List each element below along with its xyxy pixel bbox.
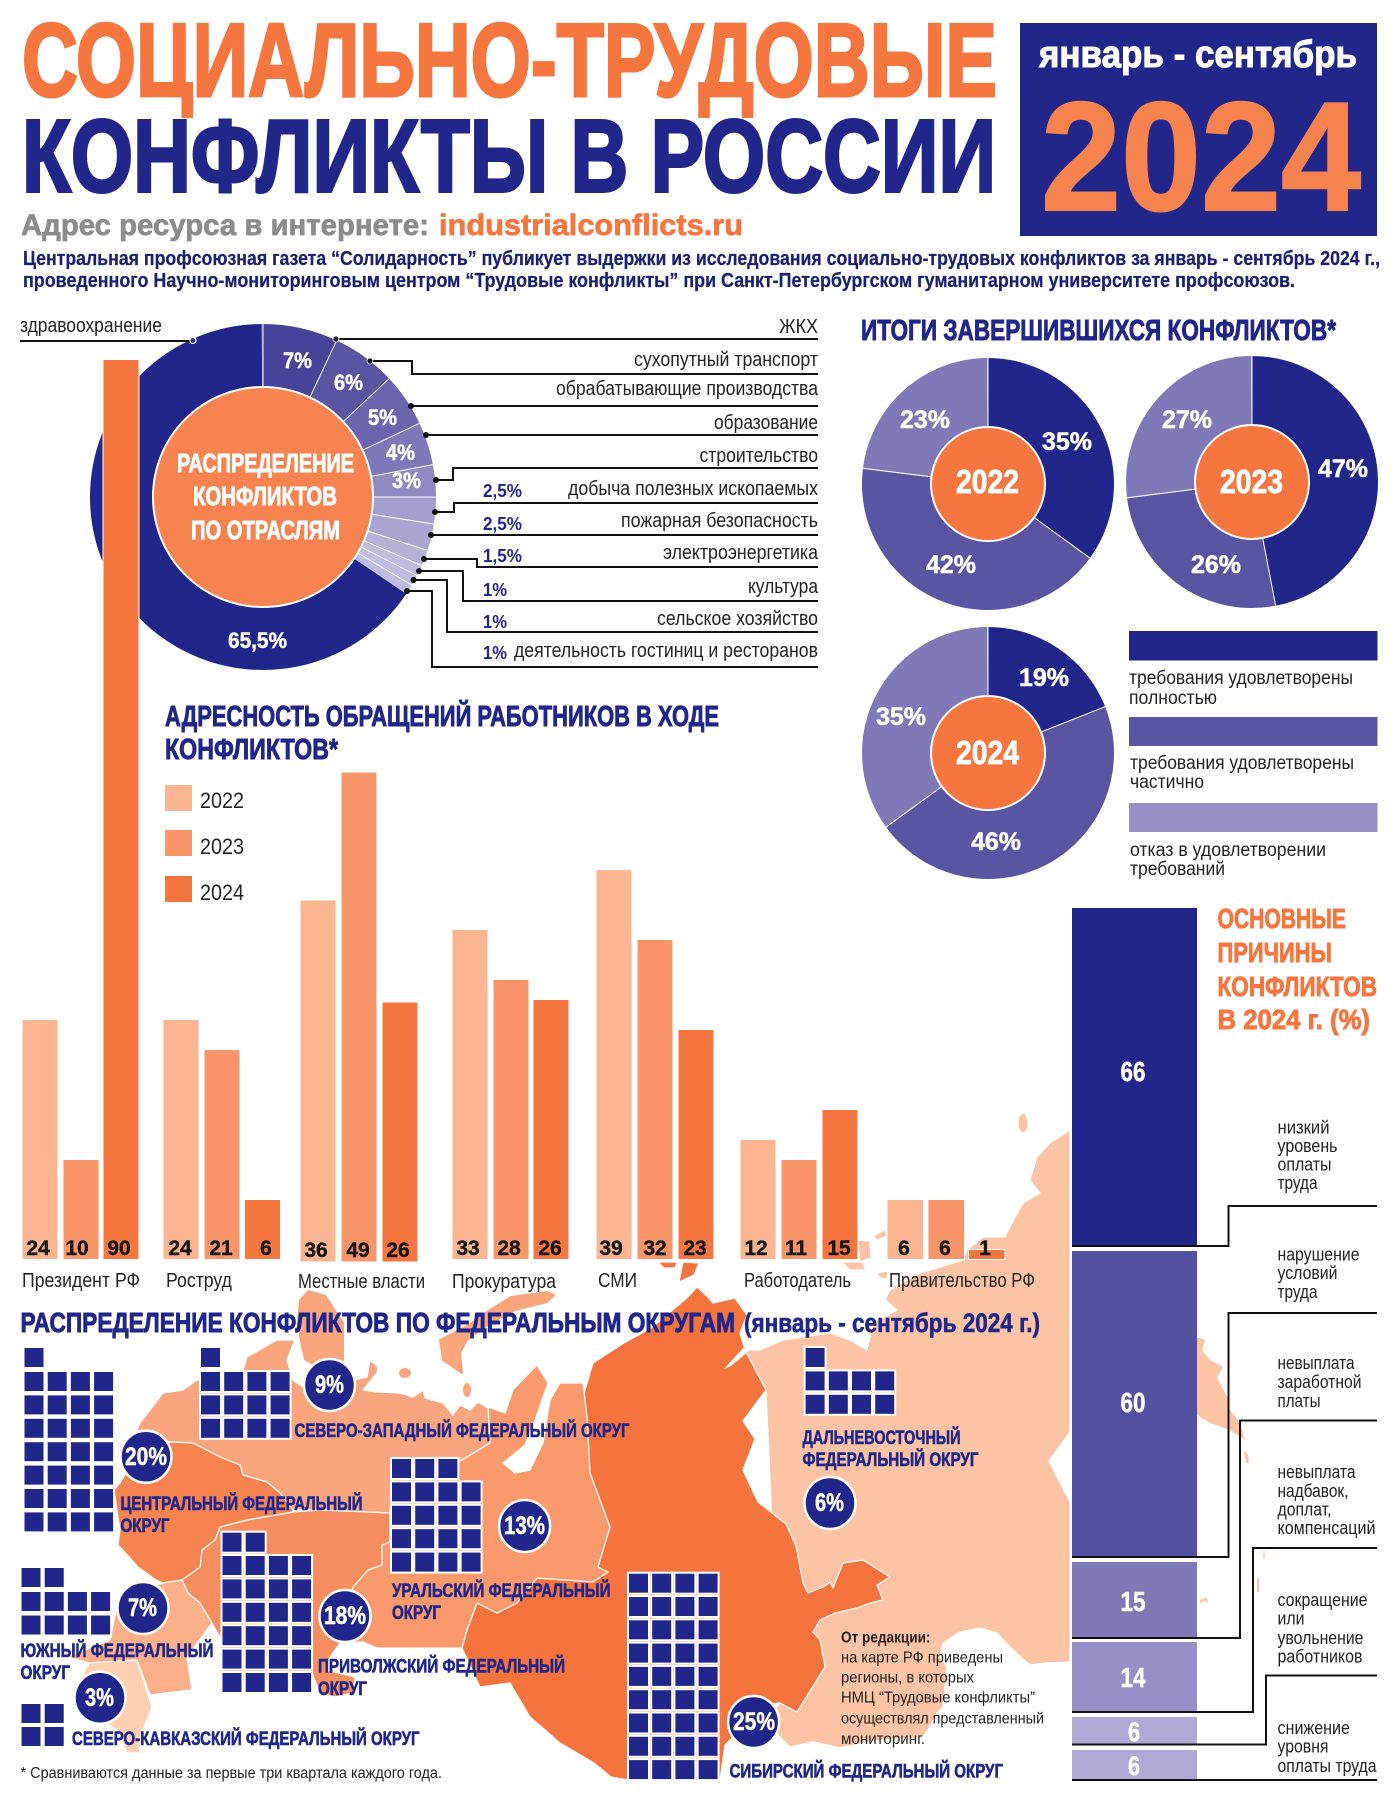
label: здравоохранение: здравоохранение (20, 315, 162, 337)
district: South: ОКРУГ (20, 1663, 70, 1684)
cause: dismissal 6 (1072, 1717, 1197, 1747)
pie 2022: 35% (1042, 428, 1092, 456)
cause: dismissal 6: 6 (1128, 1717, 1140, 1747)
group: Президент РФ: Президент РФ (22, 1270, 140, 1292)
region: South (67, 1580, 212, 1695)
chart legend (165, 785, 244, 905)
group: Работодатель: 15 (827, 1237, 851, 1260)
district: Volga: ОКРУГ (318, 1679, 367, 1700)
centre caption: КОНФЛИКТОВ (193, 481, 337, 511)
group: Работодатель: 11 (785, 1237, 807, 1260)
map heading: (январь - сентябрь 2024 г.) (744, 1308, 1040, 1338)
district: Siberia: СИБИРСКИЙ ФЕДЕРАЛЬНЫЙ ОКРУГ (730, 1761, 1003, 1783)
centre circle (153, 387, 373, 607)
website line: Адрес ресурса в интернете: (21, 209, 429, 242)
pie 2023: 26% (1191, 551, 1241, 579)
cause: low pay 66 (1072, 908, 1197, 1246)
pie 2024: 2024 (956, 734, 1020, 771)
district: Siberia (628, 1573, 1003, 1783)
group: Работодатель: 12 (744, 1237, 768, 1260)
pie legend (1129, 631, 1378, 880)
group: Прокуратура: 28 (497, 1237, 521, 1260)
group: Роструд: 24 (168, 1237, 192, 1260)
cause label: сокращение или увольнение работников (1278, 1590, 1368, 1666)
label: образование (423, 412, 818, 438)
slice values: 65,5% (228, 628, 287, 653)
pie 2022: 2022 (956, 463, 1019, 500)
slice values: 5% (368, 405, 397, 430)
label: пожарная безопасность (428, 510, 818, 538)
chart legend: 2022 (200, 788, 244, 813)
website line: industrialconflicts.ru (439, 209, 743, 242)
region: North Caucasus (76, 1660, 152, 1753)
legend item: fully satisfied: требования удовлетворены (1129, 668, 1353, 689)
slice values: 3% (392, 468, 421, 493)
pie 2022: 23% (900, 406, 950, 434)
group: Правительство РФ: 1 (979, 1237, 991, 1260)
label: ЖКХ (333, 316, 818, 342)
district: Central: 20% (125, 1443, 167, 1471)
region: Ural (340, 1365, 610, 1648)
adresses bar chart (22, 360, 1035, 1293)
donut chart: conflicts by industry (153, 324, 436, 653)
cause label: снижение уровня оплаты труда: уровня (1278, 1736, 1328, 1756)
region: North-West (136, 1290, 554, 1513)
editor's note: мониторинг. (841, 1731, 925, 1748)
group: Работодатель: Работодатель (744, 1270, 851, 1292)
cause label: нарушение условий труда: труда (1278, 1282, 1318, 1302)
map of federal districts (67, 1113, 1265, 1780)
cause label: невыплата заработной платы (1278, 1353, 1362, 1411)
district: North-West (200, 1347, 630, 1442)
cause: low pay 66: 66 (1120, 1056, 1146, 1087)
district: Far East: 6% (815, 1489, 844, 1517)
cause label: сокращение или увольнение работников: увольнение (1278, 1628, 1364, 1648)
label: добыча полезных ископаемых: 2,5% (483, 481, 522, 501)
group: Роструд: Роструд (166, 1270, 232, 1292)
district: North-West: 9% (315, 1371, 344, 1399)
district: Siberia: 25% (733, 1708, 775, 1736)
group: Прокуратура: 26 (538, 1237, 562, 1260)
intro text (23, 248, 1380, 292)
group: Прокуратура: 33 (456, 1237, 480, 1260)
group: Работодатель (740, 1110, 858, 1292)
cause: bonuses 14: 14 (1120, 1662, 1146, 1693)
causes heading: В 2024 г. (%) (1218, 1004, 1370, 1035)
cause label: невыплата надбавок, доплат, компенсаций: компенсаций (1278, 1518, 1376, 1538)
period text: январь - сентябрь (1038, 34, 1357, 76)
editor's note: регионы, в которых (841, 1670, 974, 1687)
group: СМИ: 39 (599, 1237, 623, 1260)
label: ЖКХ: ЖКХ (779, 316, 818, 338)
district: Volga: ПРИВОЛЖСКИЙ ФЕДЕРАЛЬНЫЙ (318, 1656, 565, 1678)
group: СМИ: 23 (683, 1237, 707, 1260)
label: электроэнергетика (421, 542, 819, 567)
district: North Caucasus (20, 1672, 420, 1750)
cause label: сокращение или увольнение работников: сокращение (1278, 1590, 1368, 1610)
legend item: partly satisfied: требования удовлетворены (1130, 753, 1354, 774)
cause label: невыплата надбавок, доплат, компенсаций (1278, 1462, 1376, 1538)
cause label: невыплата заработной платы: платы (1278, 1391, 1320, 1411)
cause label: невыплата заработной платы: невыплата (1278, 1353, 1355, 1373)
label: сельское хозяйство: 1% (483, 612, 507, 632)
cause label: низкий уровень оплаты труда: низкий (1278, 1118, 1330, 1138)
cause: pay reduction 6 (1072, 1750, 1197, 1781)
website line (21, 209, 743, 242)
district: Ural (391, 1458, 610, 1624)
editor's note: на карте РФ приведены (841, 1650, 1003, 1666)
chart heading (165, 699, 719, 766)
district: Central: ОКРУГ (120, 1516, 170, 1537)
group: Местные власти: Местные власти (298, 1271, 425, 1293)
district: Volga: 18% (324, 1602, 366, 1630)
pie 2023: 27% (1162, 406, 1212, 434)
label: деятельность гостиниц и ресторанов (404, 588, 818, 667)
cause label: невыплата надбавок, доплат, компенсаций: доплат, (1278, 1500, 1332, 1520)
group: Правительство РФ: 6 (898, 1237, 910, 1260)
legend item: refused: требований (1130, 859, 1225, 880)
label: культура (416, 568, 819, 601)
editor's note: НМЦ “Трудовые конфликты” (841, 1690, 1035, 1707)
pie 2023: 47% (1318, 455, 1368, 483)
group: Местные власти: 49 (346, 1239, 370, 1262)
group: Правительство РФ (887, 1200, 1035, 1292)
district: South (20, 1567, 214, 1684)
cause label: нарушение условий труда: условий (1278, 1263, 1338, 1283)
cause: unpaid wages 15: 15 (1120, 1586, 1146, 1617)
editor's note: От редакции: (841, 1629, 930, 1646)
group: Президент РФ: 90 (107, 1237, 131, 1260)
cause label: невыплата надбавок, доплат, компенсаций: невыплата (1278, 1462, 1356, 1482)
title: second line: КОНФЛИКТЫ В РОССИИ (22, 98, 996, 214)
label: пожарная безопасность: 2,5% (483, 514, 522, 534)
cause label: сокращение или увольнение работников: работников (1278, 1646, 1362, 1666)
group: Президент РФ: 24 (26, 1237, 50, 1260)
group: Президент РФ (22, 360, 140, 1292)
causes leader lines (1072, 1206, 1377, 1780)
chart legend: 2023 (200, 834, 244, 859)
label: сухопутный транспорт (367, 349, 818, 374)
label: строительство: строительство (700, 445, 818, 467)
editor's note: осуществлял представленный (841, 1711, 1044, 1728)
leader lines and labels of the donut (20, 315, 819, 667)
cause label: сокращение или увольнение работников: или (1278, 1608, 1304, 1628)
chart heading: КОНФЛИКТОВ* (165, 734, 339, 766)
causes heading: ПРИЧИНЫ (1218, 937, 1332, 968)
label: культура: 1% (483, 580, 507, 600)
district: North-West: СЕВЕРО-ЗАПАДНЫЙ ФЕДЕРАЛЬНЫЙ ОКРУГ (294, 1420, 630, 1442)
cause label: снижение уровня оплаты труда: снижение (1278, 1718, 1350, 1738)
label: сельское хозяйство (410, 577, 818, 632)
slice: health care 65.5% (176, 410, 350, 584)
region: Far East (745, 1113, 1265, 1748)
pie 2024: 35% (876, 703, 926, 731)
district: Ural: 13% (504, 1512, 545, 1540)
causes stacked bar (1072, 908, 1197, 1781)
cause label: низкий уровень оплаты труда: труда (1278, 1173, 1318, 1193)
group: Прокуратура (452, 930, 569, 1293)
district: Volga (222, 1532, 565, 1700)
group: Правительство РФ: 6 (939, 1237, 951, 1260)
label: электроэнергетика: 1,5% (483, 546, 522, 566)
group: Местные власти (298, 772, 425, 1293)
slice values: 6% (334, 370, 363, 395)
group: Местные власти: 26 (386, 1239, 410, 1262)
editor's note (841, 1629, 1044, 1748)
slice values (228, 348, 421, 653)
cause label: снижение уровня оплаты труда (1278, 1718, 1377, 1776)
district: Central: ЦЕНТРАЛЬНЫЙ ФЕДЕРАЛЬНЫЙ (120, 1493, 362, 1515)
footnote: * Сравниваются данные за первые три квартала каждого года. (20, 1765, 442, 1782)
legend item: fully satisfied (1129, 631, 1378, 709)
pie 2022: 42% (926, 551, 976, 579)
label: добыча полезных ископаемых: добыча полезных ископаемых (568, 478, 818, 500)
legend item: refused (1129, 803, 1378, 880)
cause: unpaid wages 15 (1072, 1562, 1197, 1638)
cause: conditions 60 (1072, 1251, 1197, 1556)
causes heading: ОСНОВНЫЕ (1218, 903, 1346, 934)
legend item: partly satisfied (1129, 717, 1378, 793)
slice values: 7% (283, 348, 312, 373)
map heading: РАСПРЕДЕЛЕНИЕ КОНФЛИКТОВ ПО ФЕДЕРАЛЬНЫМ ОКРУГАМ (20, 1307, 735, 1338)
pie 2022 (863, 358, 1092, 579)
cause label: низкий уровень оплаты труда (1278, 1118, 1338, 1193)
legend item: fully satisfied: полностью (1129, 688, 1217, 709)
chart legend: 2024 (200, 880, 244, 905)
district: South: 7% (128, 1594, 157, 1622)
cause label: невыплата надбавок, доплат, компенсаций: надбавок, (1278, 1481, 1348, 1501)
group: СМИ: 32 (643, 1237, 667, 1260)
district: Ural: ОКРУГ (392, 1603, 441, 1624)
label: обрабатывающие производства: обрабатывающие производства (556, 378, 819, 400)
district: North Caucasus: 3% (85, 1684, 114, 1712)
district: Far East: ФЕДЕРАЛЬНЫЙ ОКРУГ (802, 1449, 979, 1471)
cause label: низкий уровень оплаты труда: уровень (1278, 1136, 1338, 1156)
year: 2024 (1041, 70, 1361, 243)
group: Правительство РФ: Правительство РФ (889, 1270, 1035, 1292)
cause label: нарушение условий труда: нарушение (1278, 1244, 1360, 1264)
region: Siberia (462, 1262, 890, 1780)
group: Местные власти: 36 (304, 1239, 328, 1262)
label: образование: образование (714, 412, 818, 434)
group: Роструд: 21 (209, 1237, 233, 1260)
label: культура: культура (748, 576, 819, 598)
label: сельское хозяйство: сельское хозяйство (657, 608, 818, 630)
region: Volga (182, 1510, 390, 1697)
chart heading: АДРЕСНОСТЬ ОБРАЩЕНИЙ РАБОТНИКОВ В ХОДЕ (165, 699, 719, 733)
label: деятельность гостиниц и ресторанов: деятельность гостиниц и ресторанов (514, 640, 818, 662)
label: обрабатывающие производства (408, 378, 819, 409)
cause: bonuses 14 (1072, 1642, 1197, 1712)
district: Far East (802, 1347, 979, 1529)
region: Central (114, 1442, 293, 1583)
district: Far East: ДАЛЬНЕВОСТОЧНЫЙ (802, 1427, 960, 1449)
cause label: снижение уровня оплаты труда: оплаты труда (1278, 1756, 1377, 1776)
label: сухопутный транспорт: сухопутный транспорт (634, 349, 818, 371)
district: Ural: УРАЛЬСКИЙ ФЕДЕРАЛЬНЫЙ (392, 1580, 610, 1602)
group: Президент РФ: 10 (65, 1237, 89, 1260)
pie 2023: 2023 (1220, 463, 1283, 500)
cause label: низкий уровень оплаты труда: оплаты (1278, 1154, 1332, 1174)
slice values: 4% (386, 440, 415, 465)
group: Роструд (163, 1020, 280, 1292)
centre caption (177, 448, 354, 545)
pie 2024: 19% (1019, 664, 1069, 692)
group: СМИ: СМИ (598, 1270, 637, 1292)
cause label: нарушение условий труда (1278, 1244, 1360, 1302)
legend item: partly satisfied: частично (1130, 772, 1204, 793)
label: деятельность гостиниц и ресторанов: 1% (483, 643, 507, 663)
date panel (1020, 23, 1377, 243)
causes heading (1218, 903, 1377, 1035)
district: North Caucasus: СЕВЕРО-КАВКАЗСКИЙ ФЕДЕРАЛЬНЫЙ ОКРУГ (72, 1728, 420, 1750)
group: СМИ (596, 870, 714, 1292)
label: добыча полезных ископаемых (432, 478, 818, 515)
centre caption: РАСПРЕДЕЛЕНИЕ (177, 448, 354, 478)
group: Роструд: 6 (260, 1237, 272, 1260)
title: first line: СОЦИАЛЬНО-ТРУДОВЫЕ (22, 3, 997, 119)
pie 2023 (1127, 356, 1368, 606)
district: Central (24, 1347, 362, 1537)
label: пожарная безопасность: пожарная безопасность (621, 510, 818, 532)
cause: conditions 60: 60 (1120, 1387, 1146, 1418)
centre caption: ПО ОТРАСЛЯМ (191, 515, 340, 545)
pie 2024: 46% (971, 828, 1021, 856)
cause label: невыплата заработной платы: заработной (1278, 1372, 1362, 1392)
group: Прокуратура: Прокуратура (452, 1271, 557, 1293)
label: строительство (433, 445, 818, 483)
legend item: refused: отказ в удовлетворении (1130, 840, 1326, 861)
cause: pay reduction 6: 6 (1128, 1751, 1140, 1781)
pie 2024 (876, 627, 1105, 856)
district: South: ЮЖНЫЙ ФЕДЕРАЛЬНЫЙ (20, 1640, 214, 1662)
label: электроэнергетика: электроэнергетика (663, 542, 819, 564)
